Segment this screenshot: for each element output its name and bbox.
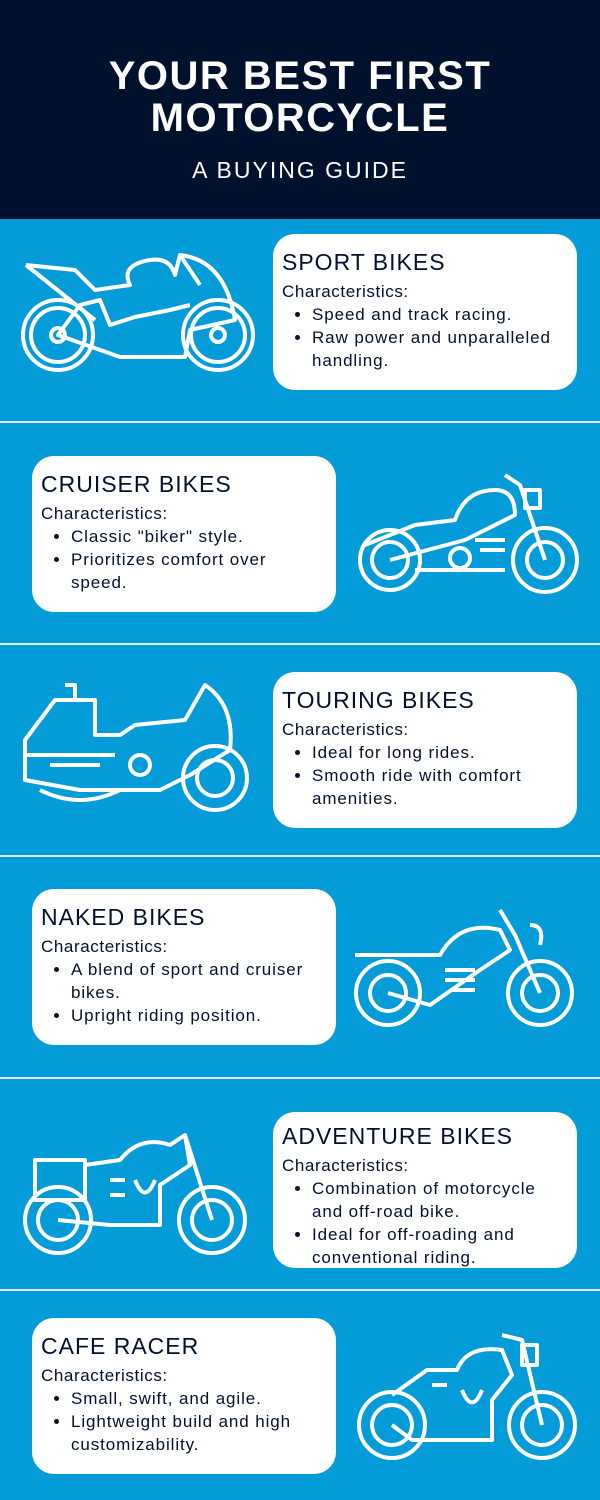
icon: sport bike bbox=[21, 253, 255, 372]
card: adventure bikes: Characteristics: bbox=[282, 1156, 409, 1175]
card: touring bikes: Characteristics: bbox=[282, 720, 409, 739]
icon: cruiser bike bbox=[358, 473, 579, 594]
header bbox=[0, 0, 600, 219]
card: cruiser bikes bbox=[32, 456, 336, 612]
card: cruiser bikes: Prioritizes comfort over bbox=[71, 550, 266, 569]
card: cafe racer: Small, swift, and agile. bbox=[71, 1389, 262, 1408]
card: cruiser bikes: Classic "biker" style. bbox=[71, 527, 244, 546]
card: sport bikes: SPORT BIKES bbox=[282, 249, 446, 275]
card: cruiser bikes: speed. bbox=[71, 573, 127, 592]
card: touring bikes bbox=[273, 672, 577, 828]
card: sport bikes: Characteristics: bbox=[282, 282, 409, 301]
card: cafe racer: Characteristics: bbox=[41, 1366, 168, 1385]
card: naked bikes: A blend of sport and cruiser bikes. bbox=[71, 960, 303, 1002]
title: YOUR BEST FIRST bbox=[109, 54, 491, 98]
card: naked bikes: NAKED BIKES bbox=[41, 904, 205, 930]
card: adventure bikes: Combination of motorcycle bbox=[312, 1179, 536, 1198]
card: naked bikes: Upright riding position. bbox=[71, 1006, 262, 1025]
card: sport bikes: Speed and track racing. bbox=[312, 305, 512, 324]
card: touring bikes: TOURING BIKES bbox=[282, 687, 475, 713]
title bbox=[109, 54, 491, 140]
card: cruiser bikes: CRUISER BIKES bbox=[41, 471, 232, 497]
icon: cafe racer bbox=[357, 1333, 577, 1460]
card: adventure bikes: Ideal for off-roading and conventional riding. bbox=[312, 1225, 515, 1267]
card: naked bikes bbox=[32, 889, 336, 1045]
card: adventure bikes bbox=[273, 1112, 577, 1268]
card: adventure bikes: and off-road bike. bbox=[312, 1202, 460, 1221]
title: MOTORCYCLE bbox=[151, 96, 449, 140]
card: sport bikes: Raw power and unparalleled handling. bbox=[312, 328, 551, 370]
icon: adventure bike bbox=[23, 1132, 247, 1255]
subtitle: A BUYING GUIDE bbox=[192, 157, 408, 183]
card: adventure bikes: ADVENTURE BIKES bbox=[282, 1123, 513, 1149]
card: touring bikes: Ideal for long rides. bbox=[312, 743, 475, 762]
card: cafe racer: Lightweight build and high customizability. bbox=[71, 1412, 291, 1454]
card: cafe racer: CAFE RACER bbox=[41, 1333, 199, 1359]
card: naked bikes: Characteristics: bbox=[41, 937, 168, 956]
card: sport bikes bbox=[273, 234, 577, 390]
card: cruiser bikes: Characteristics: bbox=[41, 504, 168, 523]
card: touring bikes: Smooth ride with comfort amenities. bbox=[312, 766, 522, 808]
card: cafe racer bbox=[32, 1318, 336, 1474]
icon: touring bike bbox=[23, 682, 249, 812]
icon: naked bike bbox=[354, 909, 574, 1027]
